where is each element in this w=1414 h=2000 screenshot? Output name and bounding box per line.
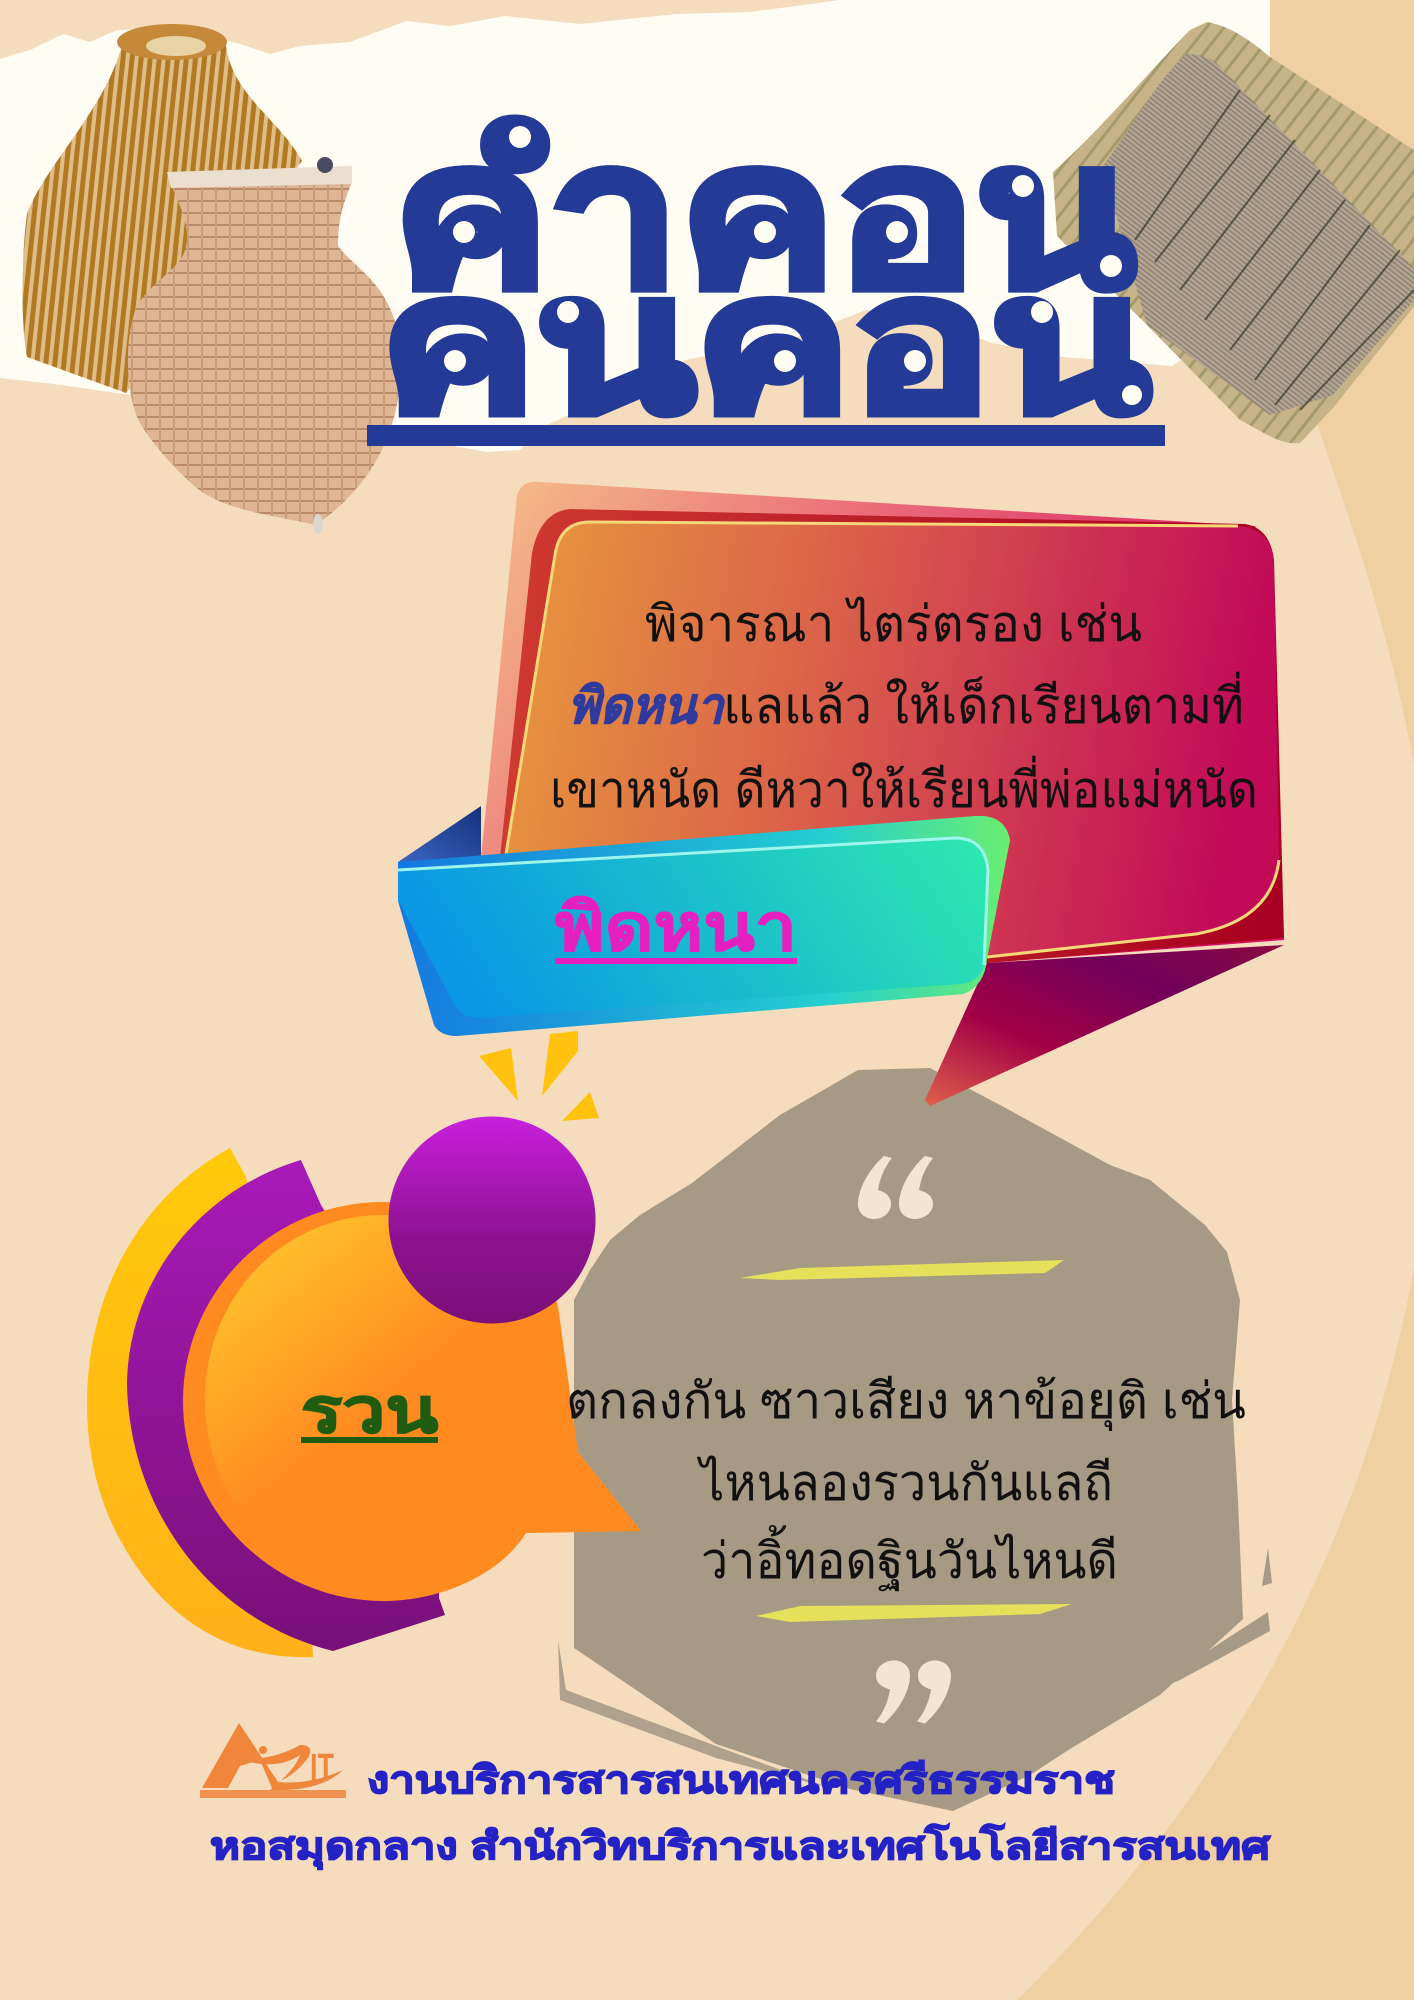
title underline [367,425,1165,446]
logo [200,1723,346,1798]
title [367,108,1165,452]
orange bubble [87,1116,641,1657]
bubble mid layer [500,509,1284,963]
sparks [479,1031,599,1121]
hexagon text: ตกลงกัน ซาวเสียง หาข้อยุติ เช่น [566,1373,1246,1431]
ribbon fold [398,806,481,862]
icon: closing quote [876,1660,951,1724]
basket: round creel [128,157,401,534]
orange word: รวน [301,1377,438,1446]
yellow stroke bottom [756,1604,1072,1622]
footer text: งานบริการสารสนเทศนครศรีธรรมราช [367,1760,1115,1802]
ribbon word: พิดหนา [555,890,797,964]
bubble tail [925,945,1284,1106]
hexagon text [566,1373,1246,1591]
title line 1: คำคอน [393,108,1135,329]
purple ball [388,1116,596,1324]
footer text [210,1760,1271,1870]
logo: IT [310,1747,334,1789]
speech bubble: top [481,482,1284,1106]
basket: fish trap [22,24,302,393]
hexagon text: ว่าอิ้ทอดฐินวันไหนดี [701,1525,1118,1591]
torn white paper [0,0,1270,452]
gray hexagon [558,1068,1272,1811]
bubble back layer [481,482,1284,963]
ribbon body [398,816,1010,1036]
bubble front [505,522,1279,957]
hexagon text: ไหนลองรวนกันแลถี [696,1455,1113,1511]
purple arc [127,1160,445,1651]
bubble text: เขาหนัด ดีหวาให้เรียนพี่พ่อแม่หนัด [550,756,1258,818]
ribbon [398,806,1010,1036]
title letter loops [444,126,1142,405]
bubble text: พิดหนาแลแล้ว ให้เด็กเรียนตามที่ [568,672,1244,734]
orange body [183,1202,641,1601]
footer text: หอสมุดกลาง สำนักวิทบริการและเทศโนโลยีสารสนเทศ [210,1823,1271,1870]
bubble text [550,596,1258,818]
basket: flat tray [1053,22,1414,443]
yellow stroke top [740,1260,1064,1280]
yellow arc [87,1148,313,1657]
bubble text: พิจารณา ไตร่ตรอง เช่น [645,596,1142,652]
icon: opening quote [858,1156,933,1219]
title line 2: คนคอน [380,242,1150,452]
